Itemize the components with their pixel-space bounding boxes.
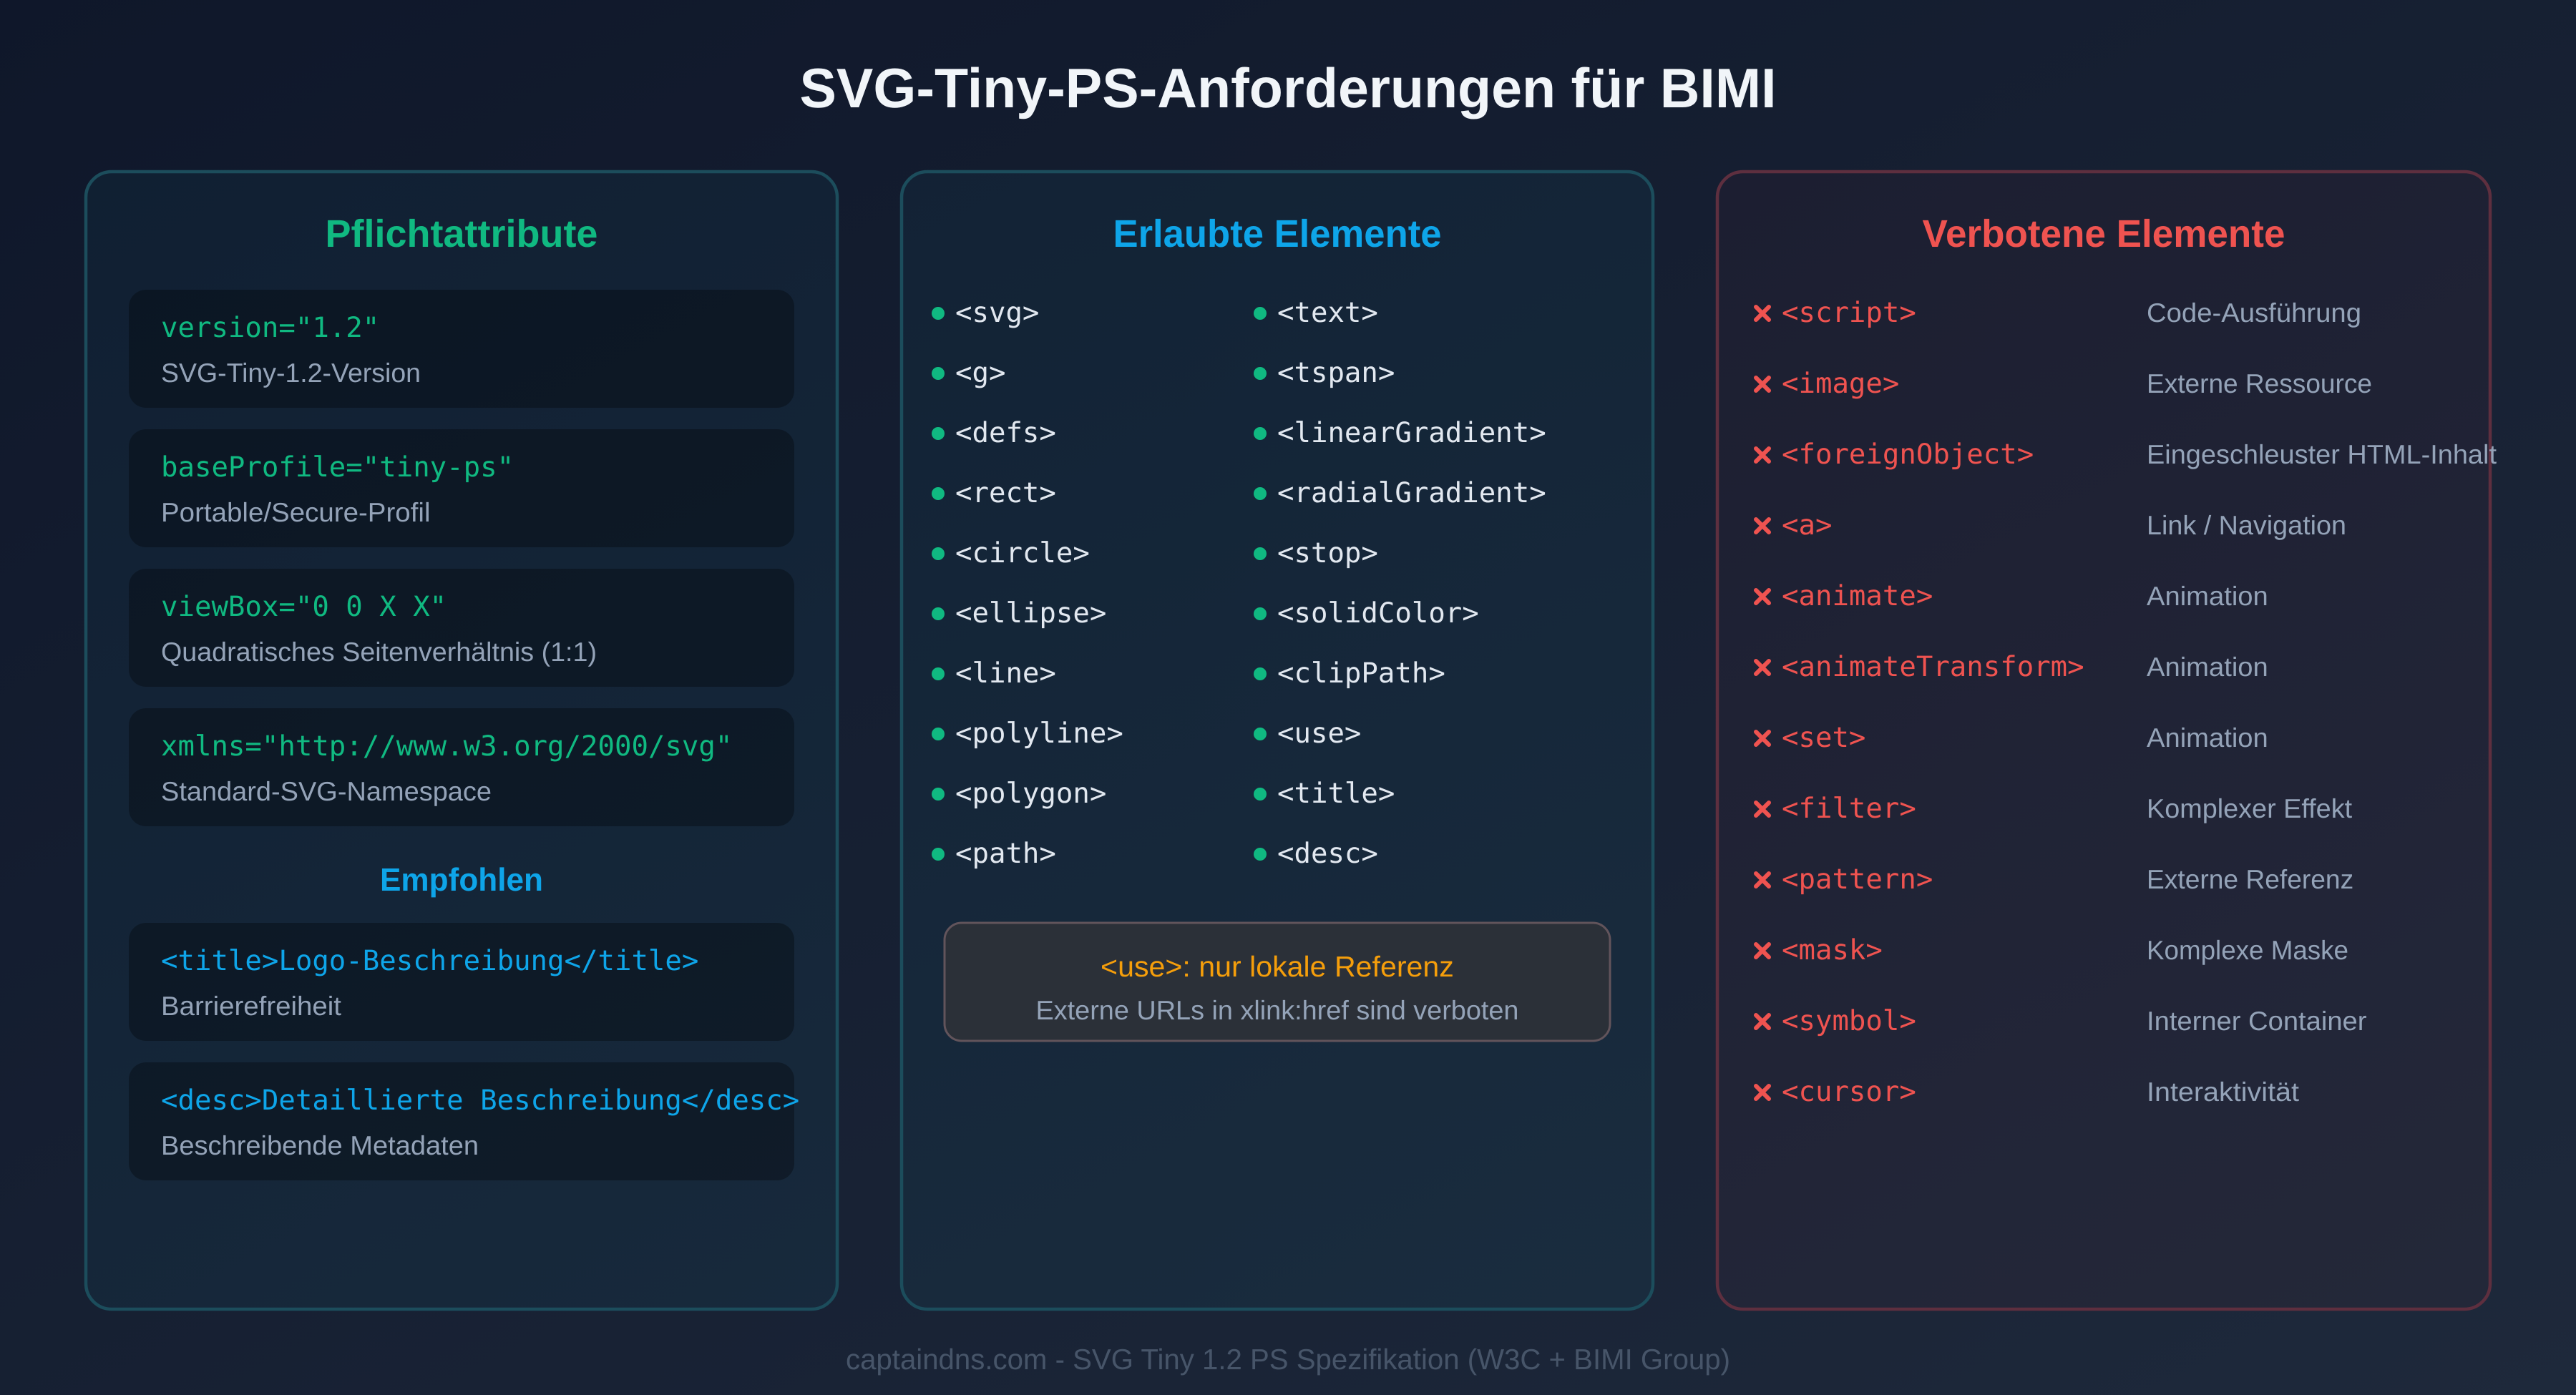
row: set: <set>: [1782, 723, 1866, 755]
row: filter: [1756, 794, 2353, 826]
row: pattern: [1756, 865, 2353, 897]
list column 1: <polygon>: [955, 779, 1107, 811]
card: version: [129, 290, 794, 408]
panel heading: Erlaubte Elemente: [1113, 212, 1441, 255]
row: symbol: Interner Container: [2147, 1007, 2367, 1037]
row: cursor: <cursor>: [1782, 1077, 1916, 1110]
list column 1: <polyline>: [955, 719, 1123, 751]
row: mask: Komplexe Maske: [2147, 936, 2348, 966]
row: pattern: Externe Referenz: [2147, 865, 2353, 895]
card: version: version="1.2": [161, 313, 379, 346]
row: a: Link / Navigation: [2147, 511, 2346, 541]
row: pattern: <pattern>: [1782, 865, 1933, 897]
list column 2: <radialGradient>: [1277, 479, 1546, 511]
row: animate: <animate>: [1782, 582, 1933, 614]
row: image: Externe Ressource: [2147, 369, 2372, 399]
list column 2: <title>: [1277, 779, 1395, 811]
row: set: Animation: [2147, 723, 2268, 753]
panel heading: Verbotene Elemente: [1922, 212, 2285, 255]
list column 1: <svg>: [955, 298, 1040, 331]
list column 1: [932, 298, 1123, 871]
row: set: [1756, 723, 2268, 755]
card: desc: Beschreibende Metadaten: [161, 1131, 479, 1161]
panel frame: [86, 172, 837, 1309]
row: script: <script>: [1782, 298, 1916, 331]
card: title: [129, 923, 794, 1041]
list column 2: [1254, 298, 1546, 871]
row: foreignObject: Eingeschleuster HTML-Inhalt: [2147, 440, 2498, 470]
row: symbol: <symbol>: [1782, 1007, 1916, 1039]
panel: Erlaubte Elemente: [902, 172, 1653, 1309]
row: filter: Komplexer Effekt: [2147, 794, 2353, 824]
row: image: [1756, 369, 2372, 401]
row: cursor: [1756, 1077, 2301, 1110]
subheading: Empfohlen: Empfohlen: [380, 863, 543, 899]
row: script: Code-Ausführung: [2147, 298, 2361, 328]
card: title: <title>Logo-Beschreibung</title>: [161, 946, 699, 979]
card: xmlns: Standard-SVG-Namespace: [161, 777, 492, 807]
callout: use restriction: <use>: nur lokale Referenz: [1101, 951, 1455, 983]
callout: use restriction: Externe URLs in xlink:href sind verboten: [1036, 996, 1519, 1026]
list column 2: <text>: [1277, 298, 1378, 331]
list column 2: <desc>: [1277, 839, 1378, 871]
row: filter: <filter>: [1782, 794, 1916, 826]
footer: captaindns.com - SVG Tiny 1.2 PS Spezifikation (W3C + BIMI Group): [846, 1343, 1730, 1376]
row: animate: Animation: [2147, 582, 2268, 612]
card: baseProfile: baseProfile="tiny-ps": [161, 453, 514, 485]
list column 1: <g>: [955, 358, 1006, 391]
card: baseProfile: Portable/Secure-Profil: [161, 498, 431, 528]
card: desc: [129, 1062, 800, 1180]
row: image: <image>: [1782, 369, 1900, 401]
title: SVG-Tiny-PS-Anforderungen für BIMI: [800, 56, 1776, 120]
callout: use restriction: [945, 923, 1610, 1041]
panel frame: [902, 172, 1653, 1309]
list column 2: <tspan>: [1277, 358, 1395, 391]
row: mask: <mask>: [1782, 936, 1883, 968]
row: animateTransform: [1756, 652, 2268, 685]
list column 2: <use>: [1277, 719, 1362, 751]
panel heading: Pflichtattribute: [325, 212, 598, 255]
card: title: Barrierefreiheit: [161, 992, 343, 1022]
row: foreignObject: [1756, 440, 2498, 472]
list column 1: <ellipse>: [955, 599, 1107, 631]
row: script: [1756, 298, 2361, 331]
card: viewBox: Quadratisches Seitenverhältnis (1:1): [161, 637, 597, 667]
row: animate: [1756, 582, 2268, 614]
panel: Verbotene Elemente: [1717, 172, 2498, 1309]
card: xmlns: xmlns="http://www.w3.org/2000/svg": [161, 732, 732, 764]
card: viewBox: [129, 569, 794, 687]
list column 2: <solidColor>: [1277, 599, 1479, 631]
list column 2: <clipPath>: [1277, 659, 1445, 691]
row: mask: [1756, 936, 2348, 968]
list column 1: <line>: [955, 659, 1056, 691]
list column 1: <circle>: [955, 539, 1090, 571]
card: version: SVG-Tiny-1.2-Version: [161, 358, 421, 388]
card: xmlns: [129, 708, 794, 826]
row: foreignObject: <foreignObject>: [1782, 440, 2034, 472]
card: viewBox: viewBox="0 0 X X": [161, 592, 447, 625]
row: a: <a>: [1782, 511, 1833, 543]
row: cursor: Interaktivität: [2147, 1077, 2301, 1107]
panel: Pflichtattribute: [86, 172, 837, 1309]
row: symbol: [1756, 1007, 2367, 1039]
list column 2: <linearGradient>: [1277, 418, 1546, 451]
row: a: [1756, 511, 2346, 543]
row: animateTransform: <animateTransform>: [1782, 652, 2084, 685]
row: animateTransform: Animation: [2147, 652, 2268, 682]
list column 2: <stop>: [1277, 539, 1378, 571]
card: desc: <desc>Detaillierte Beschreibung</desc>: [161, 1086, 800, 1118]
list column 1: <path>: [955, 839, 1056, 871]
panel frame: [1717, 172, 2490, 1309]
list column 1: <defs>: [955, 418, 1056, 451]
card: baseProfile: [129, 429, 794, 547]
list column 1: <rect>: [955, 479, 1056, 511]
